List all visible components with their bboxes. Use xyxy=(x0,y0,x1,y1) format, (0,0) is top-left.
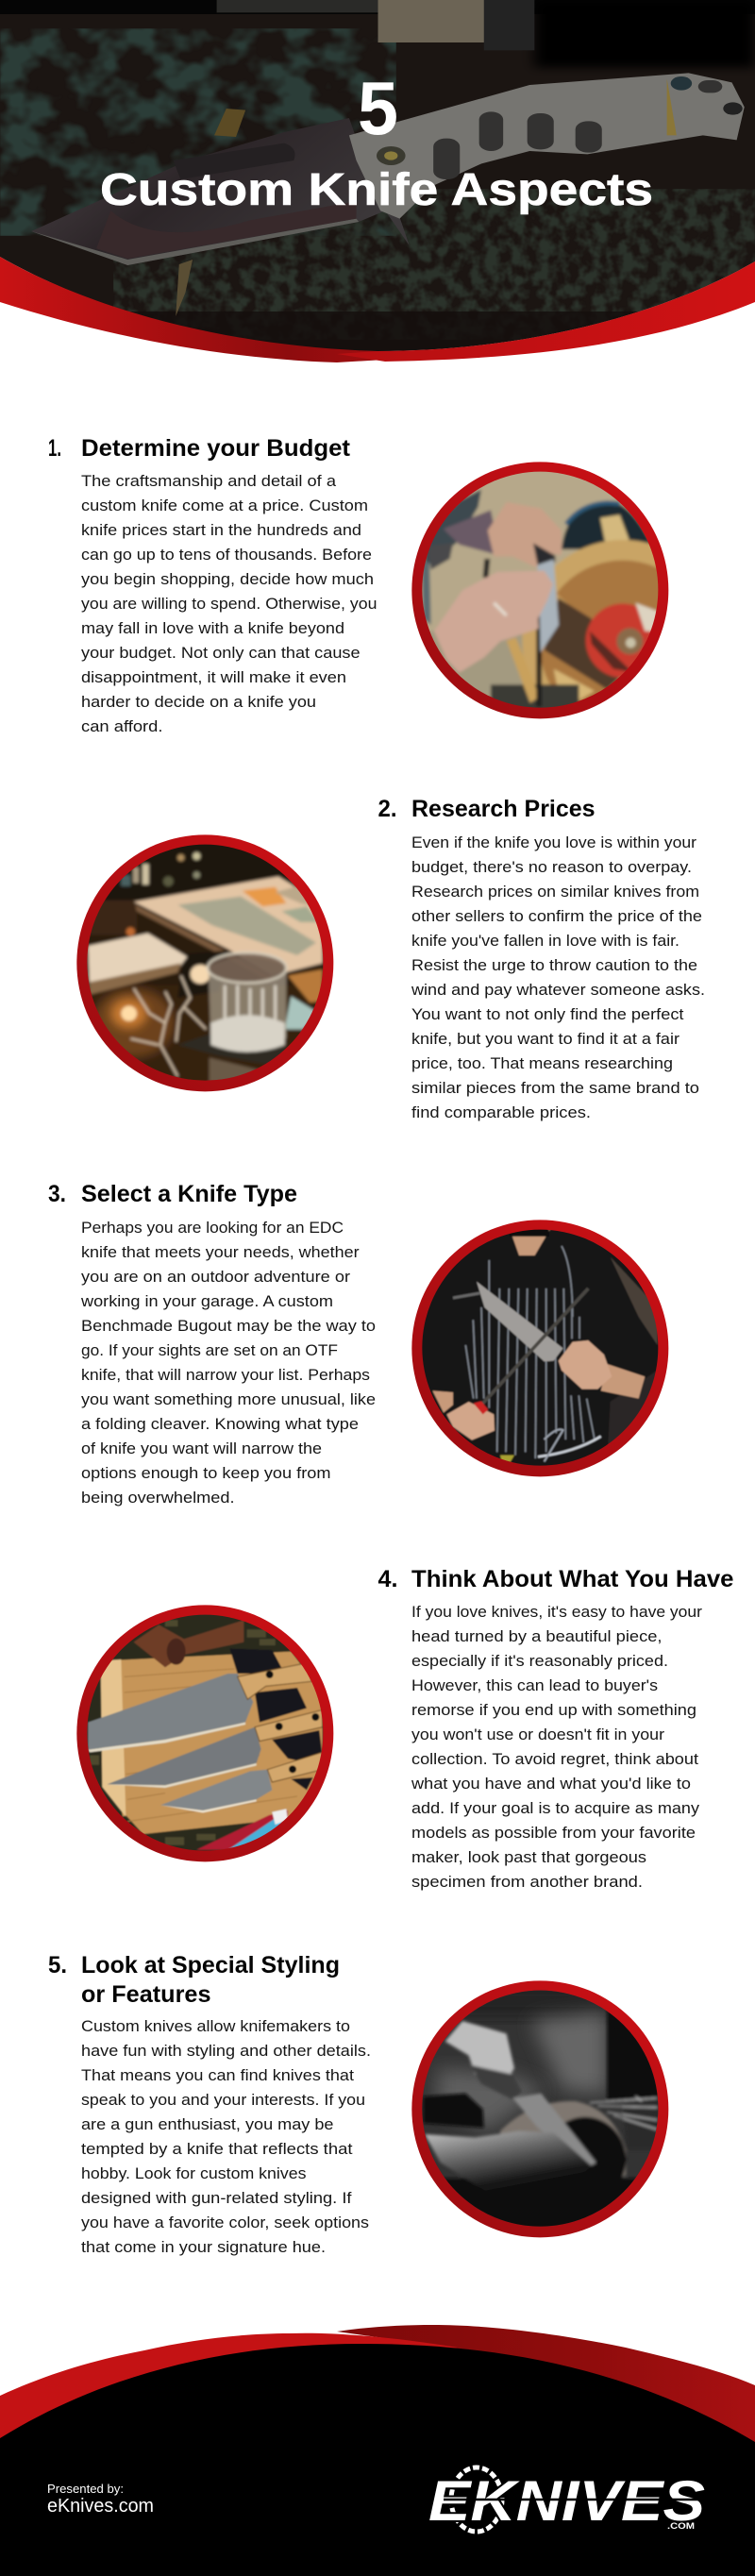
body text 1: disappointment, it will make it even xyxy=(81,669,346,686)
body text 4: collection. To avoid regret, think about xyxy=(411,1751,698,1768)
panel: footer xyxy=(0,2325,755,2576)
heading 4: Think About What You Have xyxy=(411,1566,734,1592)
brass bullets xyxy=(214,109,245,137)
body text 5: that come in your signature hue. xyxy=(81,2239,326,2256)
photo: black and white knife grinding with sparks xyxy=(406,1974,676,2244)
body text 4: head turned by a beautiful piece, xyxy=(411,1628,663,1645)
body text 2: find comparable prices. xyxy=(411,1104,591,1121)
handle xyxy=(349,73,745,219)
footer bright red swoosh xyxy=(0,2333,458,2454)
body text 1: The craftsmanship and detail of a xyxy=(81,473,337,490)
heading 2: Research Prices xyxy=(411,796,596,822)
body text 2 xyxy=(411,834,705,1121)
body text 2: similar pieces from the same brand to xyxy=(411,1080,699,1097)
presented by credit: Presented by: xyxy=(47,2482,124,2496)
body text 4: However, this can lead to buyer's xyxy=(411,1677,658,1694)
title: Custom Knife Aspects xyxy=(100,165,653,215)
body text 3: you are on an outdoor adventure or xyxy=(81,1269,351,1286)
footer dark red swoosh xyxy=(337,2325,755,2464)
body text 1: custom knife come at a price. Custom xyxy=(81,497,368,514)
heading 3: 3. xyxy=(48,1181,66,1207)
heading 1: Determine your Budget xyxy=(81,435,351,462)
title number: 5 xyxy=(358,66,398,150)
body text 3 xyxy=(80,1220,376,1507)
body text 4 xyxy=(411,1604,703,1891)
body text 5: you have a favorite color, seek options xyxy=(81,2214,369,2231)
presented by credit xyxy=(47,2482,154,2517)
red swoosh left xyxy=(0,257,385,362)
body text 4: models as possible from your favorite xyxy=(411,1825,696,1842)
body text 5: hobby. Look for custom knives xyxy=(81,2165,306,2182)
panel: section 3 select a knife type xyxy=(48,1181,676,1507)
footer black background xyxy=(0,2344,755,2576)
body text 1: harder to decide on a knife you xyxy=(81,694,316,711)
header photo: knife on rusty metal xyxy=(0,0,755,368)
heading 4: 4. xyxy=(378,1566,398,1592)
body text 4: you won't use or doesn't fit in your xyxy=(411,1726,665,1743)
body text 5: That means you can find knives that xyxy=(81,2067,354,2084)
body text 5: Custom knives allow knifemakers to xyxy=(81,2018,350,2035)
body text 2: Even if the knife you love is within your xyxy=(411,834,697,851)
heading 1: 1. xyxy=(48,435,61,462)
flashlight xyxy=(217,0,378,12)
body text 2: Resist the urge to throw caution to the xyxy=(411,957,697,974)
heading 5: 5. xyxy=(48,1952,67,1978)
body text 4: remorse if you end up with something xyxy=(411,1702,696,1719)
heading 5: or Features xyxy=(81,1981,211,2008)
presented by credit: eKnives.com xyxy=(47,2496,154,2517)
body text 5: speak to you and your interests. If you xyxy=(81,2092,365,2109)
body text 5: tempted by a knife that reflects that xyxy=(81,2141,353,2158)
body text 2: wind and pay whatever someone asks. xyxy=(411,982,705,999)
body text 4: add. If your goal is to acquire as many xyxy=(411,1800,700,1817)
body text 4: specimen from another brand. xyxy=(411,1874,643,1891)
photo: three knives on a cutting board xyxy=(71,1598,341,1868)
body text 5 xyxy=(81,2018,371,2256)
heading 5: Look at Special Styling xyxy=(81,1952,340,1978)
panel: header banner xyxy=(0,0,755,368)
eKnives logo: EKNIVES xyxy=(428,2469,705,2533)
eKnives logo: .COM xyxy=(667,2521,695,2531)
body text 2: price, too. That means researching xyxy=(411,1055,673,1072)
body text 1: may fall in love with a knife beyond xyxy=(81,620,344,637)
body text 3: knife that meets your needs, whether xyxy=(81,1244,360,1261)
body text 5: are a gun enthusiast, you may be xyxy=(81,2116,334,2133)
body text 3: you want something more unusual, like xyxy=(81,1391,376,1408)
body text 2: You want to not only find the perfect xyxy=(411,1006,684,1023)
heading 2: 2. xyxy=(378,796,396,822)
body text 3: knife, that will narrow your list. Perhaps xyxy=(81,1367,370,1384)
body text 1: you begin shopping, decide how much xyxy=(81,571,374,588)
photo: chef honing a knife xyxy=(406,1213,676,1483)
body text 3: go. If your sights are set on an OTF xyxy=(81,1342,338,1359)
body text 4: especially if it's reasonably priced. xyxy=(411,1653,668,1670)
body text 4: maker, look past that gorgeous xyxy=(411,1849,646,1866)
body text 2: Research prices on similar knives from xyxy=(411,884,699,901)
body text 5: have fun with styling and other details. xyxy=(81,2043,371,2060)
body text 3: Benchmade Bugout may be the way to xyxy=(81,1318,376,1335)
body text 1: can go up to tens of thousands. Before xyxy=(81,547,372,564)
body text 1: you are willing to spend. Otherwise, you xyxy=(81,596,378,613)
body text 2: knife, but you want to find it at a fair xyxy=(411,1031,680,1048)
body text 1: can afford. xyxy=(81,718,162,735)
body text 2: knife you've fallen in love with is fair. xyxy=(411,933,680,950)
heading 5 xyxy=(48,1952,340,2008)
body text 3: Perhaps you are looking for an EDC xyxy=(81,1220,344,1237)
body text 2: other sellers to confirm the price of the xyxy=(411,908,702,925)
red swoosh right xyxy=(337,261,755,362)
body text 4: what you have and what you'd like to xyxy=(411,1776,691,1793)
body text 4: If you love knives, it's easy to have your xyxy=(411,1604,703,1621)
heading 3: Select a Knife Type xyxy=(81,1181,297,1207)
panel: section 5 look at special styling xyxy=(48,1952,676,2256)
panel: section 4 think about what you have xyxy=(71,1566,734,1891)
body text 3: being overwhelmed. xyxy=(81,1490,234,1507)
body text 3: a folding cleaver. Knowing what type xyxy=(81,1416,359,1433)
body text 1: knife prices start in the hundreds and xyxy=(81,522,361,539)
body text 5: designed with gun-related styling. If xyxy=(81,2190,352,2207)
panel: section 1 determine your budget xyxy=(49,439,668,732)
body text 1 xyxy=(81,473,378,735)
body text 3: options enough to keep you from xyxy=(81,1465,330,1482)
panel: section 2 research prices xyxy=(71,796,705,1121)
body text 2: budget, there's no reason to overpay. xyxy=(411,859,692,876)
photo: hands sharpening knife on wheel xyxy=(411,462,668,719)
photo: whisky glass and open book xyxy=(71,828,341,1098)
body text 3: working in your garage. A custom xyxy=(80,1293,333,1310)
body text 1: your budget. Not only can that cause xyxy=(81,645,361,662)
blade xyxy=(31,118,410,265)
body text 3: of knife you want will narrow the xyxy=(81,1440,322,1457)
